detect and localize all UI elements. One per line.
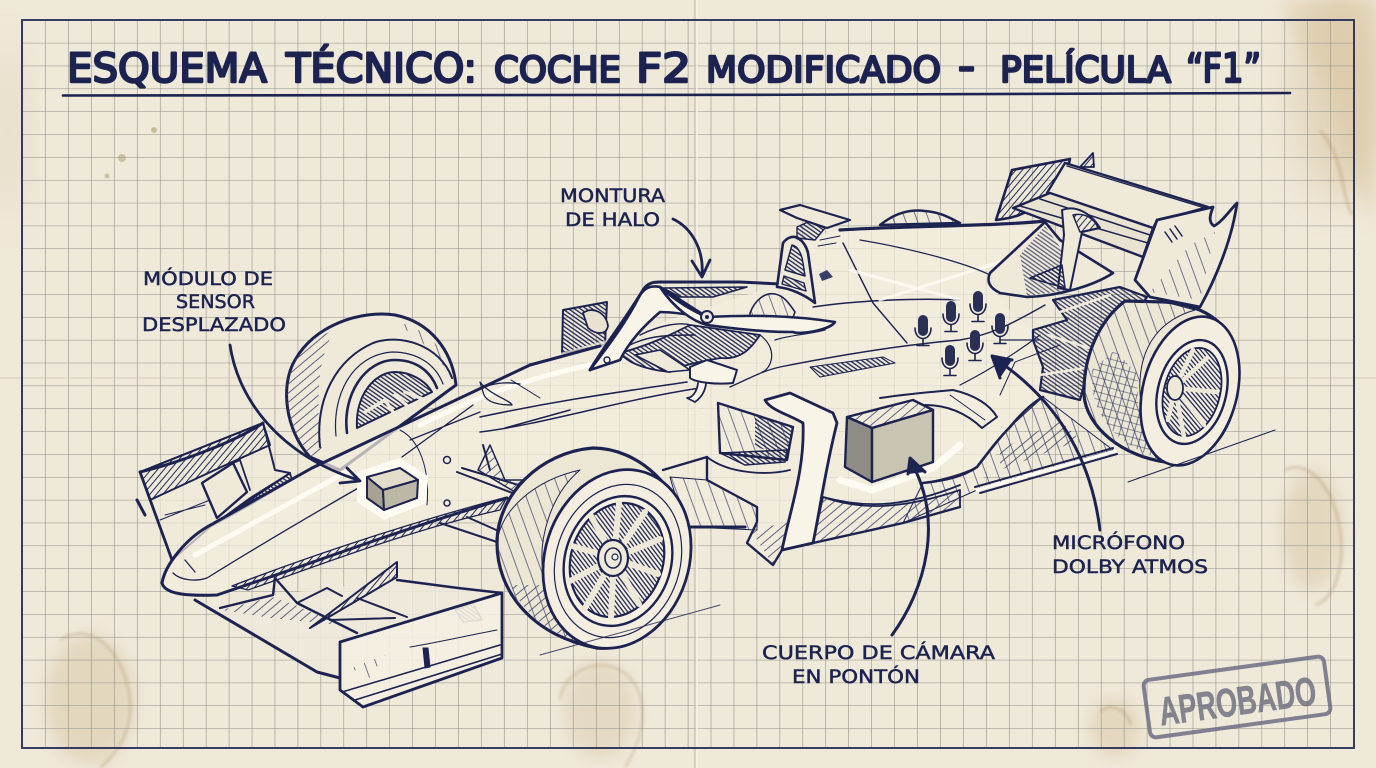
floor and lower sidepod (663, 445, 960, 565)
F2 car sketch (137, 153, 1275, 707)
camera body box (845, 400, 933, 482)
label: sensor module: DESPLAZADO (142, 314, 286, 336)
label: microphone: DOLBY ATMOS (1052, 556, 1208, 578)
label: sensor module (142, 266, 286, 336)
stamp: approved (1143, 656, 1331, 738)
title: MODIFICADO (706, 50, 941, 91)
bargeboard (765, 393, 837, 550)
far front wing endplate (137, 423, 292, 560)
airbox (777, 205, 850, 303)
label: microphone: MICRÓFONO (1052, 530, 1185, 554)
label: microphone (1052, 530, 1208, 578)
near rear wheel (1084, 301, 1275, 482)
arrow: sensor module (230, 345, 360, 483)
title: COCHE (494, 50, 621, 91)
sensor module box (357, 458, 428, 520)
label: halo mount: DE HALO (565, 209, 660, 231)
halo and cockpit (590, 282, 835, 402)
arrow: halo mount (673, 219, 710, 277)
title: - (958, 44, 975, 90)
label: camera body (762, 641, 995, 688)
label: halo mount (560, 185, 665, 231)
near front wheel (497, 448, 720, 668)
main body shell (162, 221, 1045, 595)
title: TÉCNICO: (285, 44, 477, 92)
title: F2 (636, 46, 691, 92)
label: sensor module: MÓDULO DE (143, 266, 273, 290)
label: camera body: EN PONTÓN (792, 664, 920, 688)
arrow: camera body (892, 458, 928, 635)
far front wheel (287, 314, 456, 470)
label: camera body: CUERPO DE CÁMARA (762, 641, 995, 664)
far mirror (562, 302, 608, 353)
title: “F1” (1186, 46, 1261, 92)
near front wing (195, 562, 502, 707)
rear diffuser and suspension (1033, 287, 1147, 400)
sidepod inlet (707, 403, 793, 473)
title: ESQUEMA (67, 46, 268, 92)
body lines and nose (162, 208, 1117, 595)
title: PELÍCULA (1000, 49, 1171, 91)
label: sensor module: SENSOR (176, 291, 255, 313)
rear wing (880, 153, 1237, 307)
title underline (63, 93, 1290, 96)
title (67, 44, 1261, 92)
arrow: microphones (992, 356, 1100, 530)
microphone array (915, 291, 1008, 376)
label: halo mount: MONTURA (560, 185, 665, 207)
